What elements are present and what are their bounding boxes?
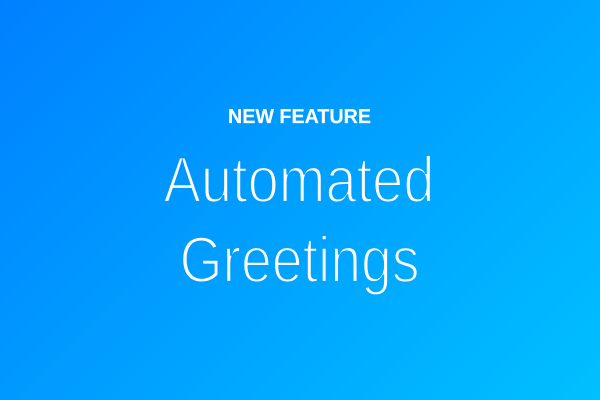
title line: Greetings: Greetings — [180, 223, 420, 296]
eyebrow: new feature: NEW FEATURE — [228, 106, 371, 128]
title line: Automated: Automated — [164, 143, 434, 216]
title block — [164, 143, 434, 296]
